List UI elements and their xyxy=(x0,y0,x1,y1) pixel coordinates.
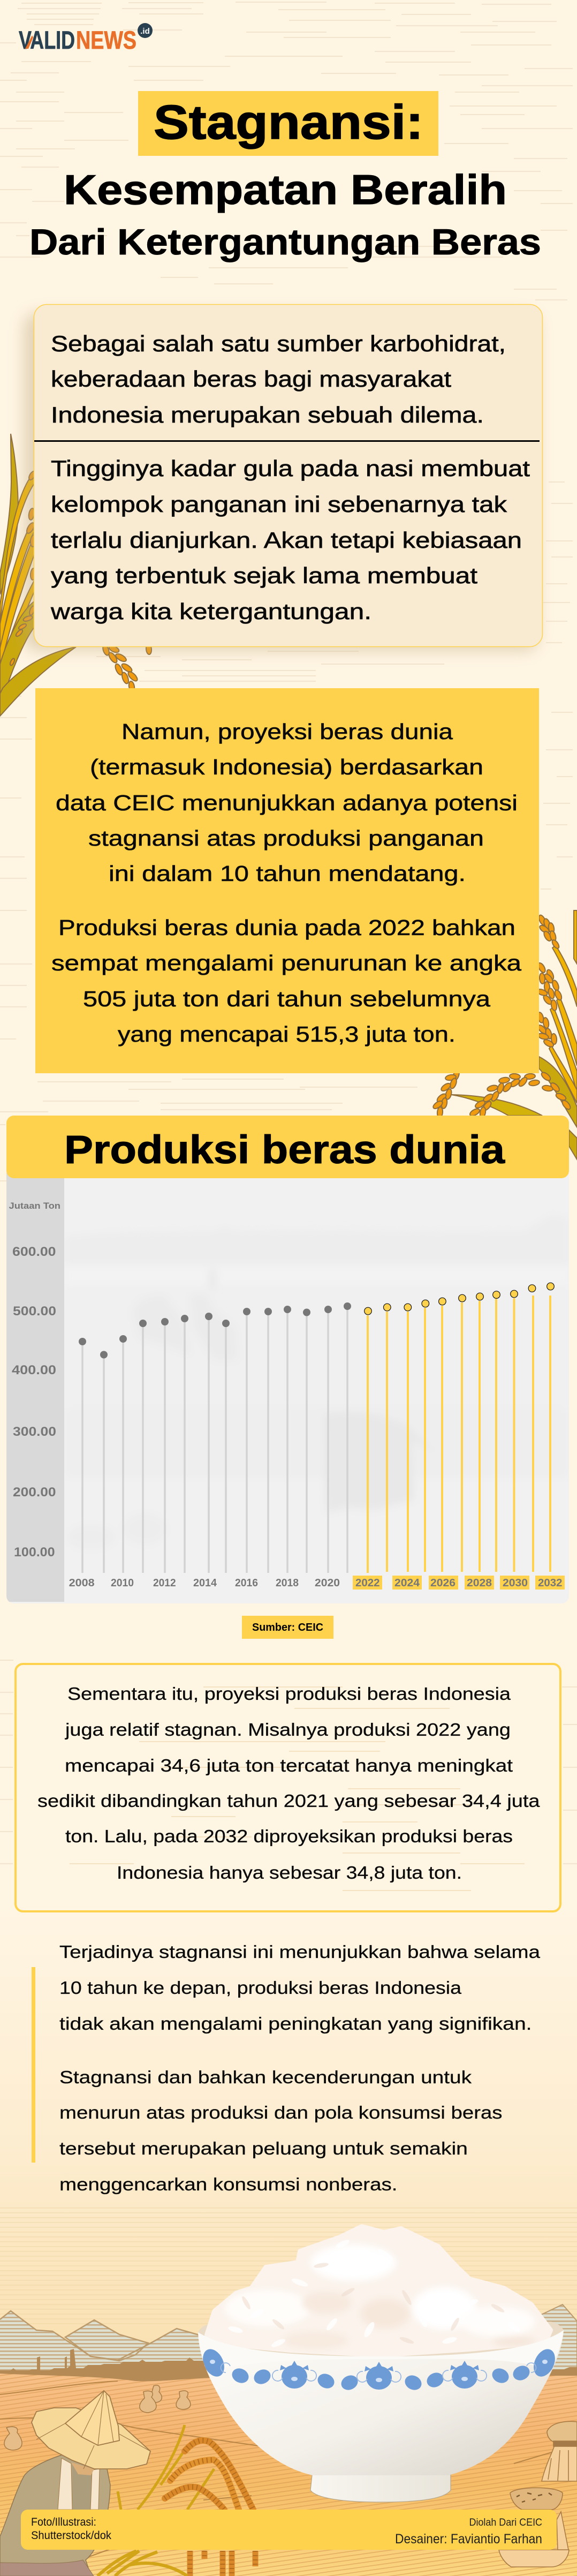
lollipop series: historical 2008-2021 xyxy=(79,1302,351,1573)
chart title bar: Produksi beras dunia xyxy=(64,1127,505,1172)
logo: Validnews.id: VALID xyxy=(19,26,75,54)
projection paragraph two: Produksi beras dunia pada 2022 bahkan xyxy=(58,915,515,940)
panel: Indonesia production text box: juga relatif stagnan. Misalnya produksi 2022 yang xyxy=(65,1720,511,1739)
panel: Indonesia production text box: Sementara itu, proyeksi produksi beras Indonesia xyxy=(67,1684,511,1704)
projection paragraph one: stagnansi atas produksi panganan xyxy=(88,826,484,850)
footer credit bar: Foto/Illustrasi: xyxy=(31,2516,96,2528)
projection paragraph one xyxy=(56,719,518,886)
scene: small sheaves xyxy=(4,2385,191,2450)
intro paragraph one: Indonesia merupakan sebuah dilema. xyxy=(51,402,484,427)
closing text block: 10 tahun ke depan, produksi beras Indonesia xyxy=(59,1978,462,1998)
intro paragraph two xyxy=(50,456,530,624)
panel: Indonesia production text box: mencapai 34,6 juta ton tercatat hanya meningkat xyxy=(65,1756,513,1775)
intro paragraph two: terlalu dianjurkan. Akan tetapi kebiasaan xyxy=(51,528,522,553)
background: dashed paper texture xyxy=(0,2,573,300)
faint photo of rice field xyxy=(329,1418,410,1504)
panel: Indonesia production text box: ton. Lalu, pada 2032 diproyeksikan produksi beras xyxy=(65,1826,513,1846)
projection paragraph one: (termasuk Indonesia) berdasarkan xyxy=(90,755,483,779)
panel: chart background xyxy=(6,1173,569,1603)
closing text block: tidak akan mengalami peningkatan yang signifikan. xyxy=(59,2014,532,2033)
y axis labels: 500.00 xyxy=(13,1304,56,1319)
rice stalks left xyxy=(0,434,76,716)
x axis year labels: 2032 xyxy=(538,1577,562,1589)
chart title bar xyxy=(6,1116,569,1178)
projection paragraph two: 505 juta ton dari tahun sebelumnya xyxy=(83,986,490,1011)
scene: sky stripe lines xyxy=(0,2206,577,2324)
x axis year labels: 2008 xyxy=(69,1577,95,1589)
inner texture of Indonesia box and lower text xyxy=(0,1687,562,2213)
x axis year labels: 2028 xyxy=(467,1577,492,1589)
intro paragraph one: keberadaan beras bagi masyarakat xyxy=(51,366,451,391)
x axis year labels: 2018 xyxy=(276,1577,299,1589)
projection paragraph one: ini dalam 10 tahun mendatang. xyxy=(109,861,466,886)
intro paragraph two: warga kita ketergantungan. xyxy=(50,599,371,624)
rice stalks right xyxy=(432,910,577,1159)
projection paragraph two: yang mencapai 515,3 juta ton. xyxy=(118,1022,455,1046)
title block: Dari Ketergantungan Beras xyxy=(29,222,541,262)
x axis year labels: 2024 xyxy=(394,1577,420,1589)
illustration: golden rice plant xyxy=(97,2425,255,2576)
intro paragraph two: yang terbentuk sejak lama membuat xyxy=(51,563,477,588)
intro paragraph two: kelompok panganan ini sebenarnya tak xyxy=(51,492,507,517)
projection paragraph two: sempat mengalami penurunan ke angka xyxy=(51,951,521,975)
footer credit bar: Shutterstock/dok xyxy=(31,2529,111,2542)
y axis labels: 300.00 xyxy=(13,1425,56,1439)
y axis labels: 200.00 xyxy=(13,1485,56,1500)
closing text block: Terjadinya stagnansi ini menunjukkan bahwa selama xyxy=(59,1942,541,1962)
rice mound xyxy=(207,2227,550,2355)
panel: Indonesia production text box: Indonesia hanya sebesar 34,8 juta ton. xyxy=(117,1863,462,1882)
source tag: Sumber: CEIC xyxy=(252,1622,323,1633)
panel: yellow projection box xyxy=(35,688,539,1073)
logo: Validnews.id: .id xyxy=(140,27,150,36)
illustration: farmer xyxy=(0,2391,150,2576)
y axis labels xyxy=(9,1201,60,1560)
y axis labels: 600.00 xyxy=(12,1245,56,1259)
x axis year labels: 2010 xyxy=(111,1577,134,1589)
y axis labels: 400.00 xyxy=(12,1363,56,1377)
y axis labels: 100.00 xyxy=(14,1545,55,1560)
x axis year labels: 2012 xyxy=(153,1577,176,1589)
bowl inner rim xyxy=(198,2322,564,2357)
footer credit bar: Diolah Dari CEIC xyxy=(469,2517,542,2528)
projection paragraph one: Namun, proyeksi beras dunia xyxy=(122,719,453,744)
scene: harvest field xyxy=(0,2374,577,2576)
closing text block: menurun atas produksi dan pola konsumsi beras xyxy=(59,2103,502,2122)
panel: Indonesia production text box: sedikit dibandingkan tahun 2021 yang sebesar 34,4 juta xyxy=(37,1791,540,1811)
closing text block xyxy=(59,1942,541,2194)
footer credit bar xyxy=(21,2510,557,2550)
closing text block: Stagnansi dan bahkan kecenderungan untuk xyxy=(59,2067,472,2087)
x axis year labels xyxy=(69,1576,565,1590)
scene: mountains xyxy=(0,2304,577,2375)
blue floral band xyxy=(203,2349,555,2390)
bowl front rim xyxy=(198,2330,564,2372)
x axis year labels: 2020 xyxy=(315,1577,340,1589)
footer credit bar: Desainer: Faviantio Farhan xyxy=(395,2532,542,2547)
bowl foot xyxy=(310,2470,451,2502)
bowl body xyxy=(198,2330,564,2475)
y axis column xyxy=(6,1173,64,1602)
scene: sky gradient xyxy=(0,1907,577,2378)
intro paragraph two: Tingginya kadar gula pada nasi membuat xyxy=(51,456,530,481)
rice ear below first card xyxy=(102,644,152,692)
source tag xyxy=(242,1616,333,1639)
intro paragraph one: Sebagai salah satu sumber karbohidrat, xyxy=(51,331,506,356)
closing text accent bar xyxy=(32,1967,35,2163)
intro paragraph one xyxy=(51,331,506,427)
panel: intro card xyxy=(24,304,543,651)
projection paragraph two xyxy=(51,915,521,1046)
scene: tree line xyxy=(0,2349,577,2381)
lollipop series: projection 2022-2032 xyxy=(365,1283,554,1573)
x axis year labels: 2022 xyxy=(355,1577,380,1589)
rice bowl xyxy=(198,2227,564,2502)
title block: Stagnansi: xyxy=(154,96,423,149)
title block xyxy=(29,91,541,262)
x axis year labels: 2016 xyxy=(235,1577,258,1589)
logo: Validnews.id xyxy=(19,23,153,54)
x axis year labels: 2030 xyxy=(503,1577,528,1589)
illustration: right sheaves xyxy=(499,2421,577,2567)
x axis year labels: 2026 xyxy=(430,1577,455,1589)
y axis labels: Jutaan Ton xyxy=(9,1201,60,1211)
title block: Kesempatan Beralih xyxy=(64,166,507,213)
panel: Indonesia production text box xyxy=(16,1664,560,1911)
x axis year labels: 2014 xyxy=(193,1577,217,1589)
farmer hat xyxy=(32,2391,150,2469)
closing text block: tersebut merupakan peluang untuk semakin xyxy=(59,2138,468,2158)
logo: Validnews.id: NEWS xyxy=(76,26,136,54)
projection paragraph one: data CEIC menunjukkan adanya potensi xyxy=(56,790,518,815)
closing text block: menggencarkan konsumsi nonberas. xyxy=(59,2174,397,2194)
